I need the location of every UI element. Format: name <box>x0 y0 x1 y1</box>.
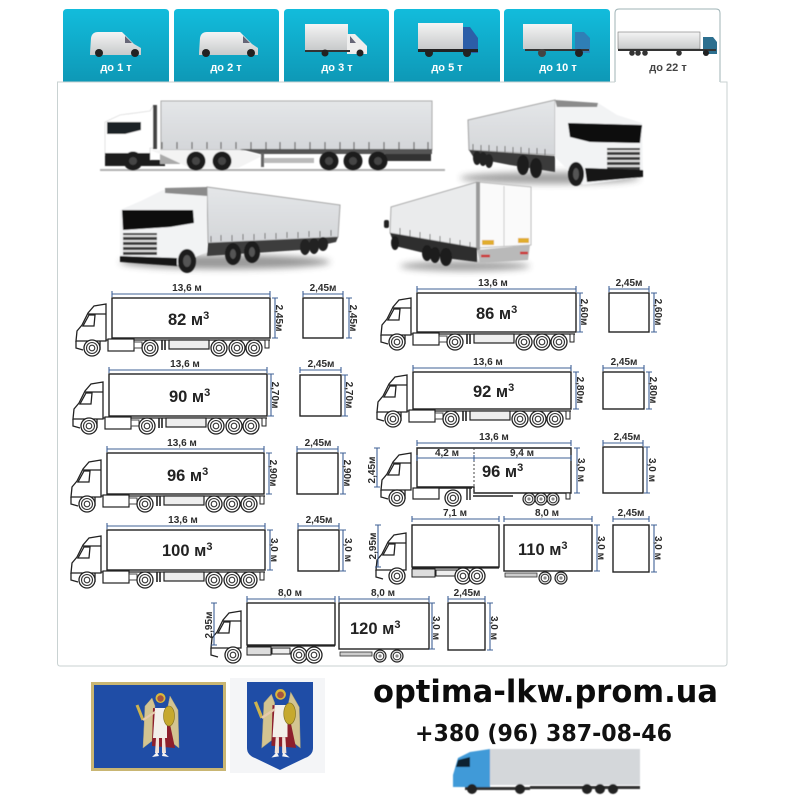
diagram: 96 m3 truck: 96 м <box>167 467 202 485</box>
diagram: 90 m3 truck <box>73 359 280 434</box>
diagram: 82 m3 truck: 2,45м <box>273 305 284 331</box>
cross-section: 120 m3 <box>448 588 499 650</box>
photo: truck rear view <box>384 182 531 271</box>
diagram: 110 m3 road train: 2,95м <box>368 533 379 559</box>
cross-section: 96 m3 low-deck: 2,45м <box>614 432 640 443</box>
cross-section: 100 m3: 3,0 м <box>342 538 353 562</box>
diagram: 92 m3 truck: 92 м <box>473 383 508 401</box>
diagram: 96 m3 truck: 13,6 м <box>167 438 197 449</box>
diagram: 96 m3 low-deck truck: 2,45м <box>367 457 378 483</box>
cross-section: 100 m3 <box>298 515 353 571</box>
website: optima-lkw.prom.ua <box>373 674 718 710</box>
diagram: 86 m3 truck: 13,6 м <box>478 278 508 289</box>
diagram: 100 m3 truck: 3,0 м <box>268 538 279 562</box>
cross-section: 110 m3: 3,0 м <box>652 536 663 560</box>
cross-section: 100 m3: 2,45м <box>306 515 332 526</box>
diagram: 100 m3 truck <box>71 515 279 588</box>
diagram: 96 m3 low-deck truck <box>367 432 586 506</box>
tab: up to 10 t: до 10 т <box>539 62 577 74</box>
icon: blue truck <box>453 749 640 794</box>
diagram: 82 m3 truck: 3 <box>203 310 209 322</box>
diagram: 92 m3 truck: 13,6 м <box>473 357 503 368</box>
diagram: 120 m3 road train: 8,0 м <box>371 588 395 599</box>
diagram: 90 m3 truck: 2,70м <box>269 382 280 408</box>
cross-section: 96 m3 low-deck <box>603 432 657 493</box>
tab: up to 3 t: до 3 т <box>321 62 353 74</box>
cross-section: 96 m3 <box>297 438 352 494</box>
cross-section: 90 m3: 2,70м <box>343 382 354 408</box>
diagram: 100 m3 truck: 100 м <box>162 542 206 560</box>
diagram: 96 m3 truck: 2,90м <box>267 460 278 486</box>
diagram: 96 m3 low-deck truck: 4,2 м <box>435 448 459 459</box>
tab: up to 1 t: до 1 т <box>100 62 132 74</box>
diagram: 82 m3 truck: 82 м <box>168 311 203 329</box>
cross-section: 120 m3: 2,45м <box>454 588 480 599</box>
diagram: 92 m3 truck <box>377 357 585 427</box>
photo: truck front-left view <box>120 187 340 273</box>
diagram: 110 m3 road train: 7,1 м <box>443 508 467 519</box>
diagram: 100 m3 truck: 3 <box>206 541 212 553</box>
diagram: 120 m3 road train <box>204 588 441 663</box>
diagram: 96 m3 truck: 3 <box>202 466 208 478</box>
diagram: 110 m3 road train: 3,0 м <box>595 536 606 560</box>
cross-section: 86 m3: 2,45м <box>616 278 642 289</box>
cross-section: 82 m3 <box>303 283 358 338</box>
diagram: 120 m3 road train: 3 <box>394 619 400 631</box>
diagram: 86 m3 truck: 2,60м <box>578 299 589 325</box>
diagram: 120 m3 road train: 3,0 м <box>430 616 441 640</box>
cross-section: 86 m3 <box>609 278 663 332</box>
phone number: +380 (96) 387-08-46 <box>415 721 672 747</box>
diagram: 120 m3 road train: 120 м <box>350 620 394 638</box>
diagram: 96 m3 low-deck truck: 96 м <box>482 463 517 481</box>
diagram: 96 m3 low-deck truck: 3 <box>517 462 523 474</box>
cross-section: 82 m3: 2,45м <box>347 305 358 331</box>
diagram: 86 m3 truck: 86 м <box>476 305 511 323</box>
diagram: 100 m3 truck: 13,6 м <box>168 515 198 526</box>
diagram: 96 m3 low-deck truck: 13,6 м <box>479 432 509 443</box>
tab: up to 2 t <box>174 9 279 82</box>
cross-section: 82 m3: 2,45м <box>310 283 336 294</box>
cross-section: 110 m3 <box>613 508 663 572</box>
tab bar <box>63 9 720 83</box>
cross-section: 96 m3: 2,90м <box>341 460 352 486</box>
flag of Kyiv <box>92 684 224 770</box>
tab: up to 1 t <box>63 9 169 82</box>
photo: truck front-right view <box>460 100 643 186</box>
cross-section: 92 m3: 2,80м <box>647 377 658 403</box>
diagram: 110 m3 road train <box>368 508 606 584</box>
diagram: 86 m3 truck: 3 <box>511 304 517 316</box>
diagram: 86 m3 truck <box>381 278 589 350</box>
tab: up to 2 t: до 2 т <box>210 62 242 74</box>
coat of arms of Kyiv <box>230 678 325 773</box>
diagram: 120 m3 road train: 2,95м <box>204 612 215 638</box>
cross-section: 120 m3: 3,0 м <box>488 616 499 640</box>
cross-section: 96 m3: 2,45м <box>305 438 331 449</box>
tab: up to 22 t (active) <box>615 9 720 83</box>
cross-section: 96 m3 low-deck: 3,0 м <box>646 458 657 482</box>
cross-section: 92 m3 <box>603 357 658 409</box>
cross-section: 92 m3: 2,45м <box>611 357 637 368</box>
diagram: 92 m3 truck: 2,80м <box>574 377 585 403</box>
diagram: 96 m3 truck <box>71 438 278 512</box>
diagram: 82 m3 truck: 13,6 м <box>172 283 202 294</box>
diagram: 92 m3 truck: 3 <box>508 382 514 394</box>
tab: up to 5 t <box>394 9 500 82</box>
tab: up to 22 t (active): до 22 т <box>649 62 687 74</box>
diagram: 90 m3 truck: 13,6 м <box>170 359 200 370</box>
photo: truck side view <box>100 101 445 170</box>
cross-section: 86 m3: 2,60м <box>652 299 663 325</box>
tab: up to 3 t <box>284 9 389 82</box>
tab: up to 10 t <box>504 9 610 82</box>
diagram: 90 m3 truck: 3 <box>204 387 210 399</box>
cross-section: 110 m3: 2,45м <box>618 508 644 519</box>
diagram: 110 m3 road train: 110 м <box>518 541 561 559</box>
diagram: 90 m3 truck: 90 м <box>169 388 204 406</box>
diagram: 96 m3 low-deck truck: 9,4 м <box>510 448 534 459</box>
cross-section: 90 m3: 2,45м <box>308 359 334 370</box>
diagram: 120 m3 road train: 8,0 м <box>278 588 302 599</box>
cross-section: 90 m3 <box>300 359 354 416</box>
diagram: 110 m3 road train: 3 <box>561 540 568 552</box>
tab: up to 5 t: до 5 т <box>431 62 463 74</box>
diagram: 96 m3 low-deck truck: 3,0 м <box>575 458 586 482</box>
main panel <box>58 82 727 666</box>
diagram: 82 m3 truck <box>76 283 284 356</box>
diagram: 110 m3 road train: 8,0 м <box>535 508 559 519</box>
